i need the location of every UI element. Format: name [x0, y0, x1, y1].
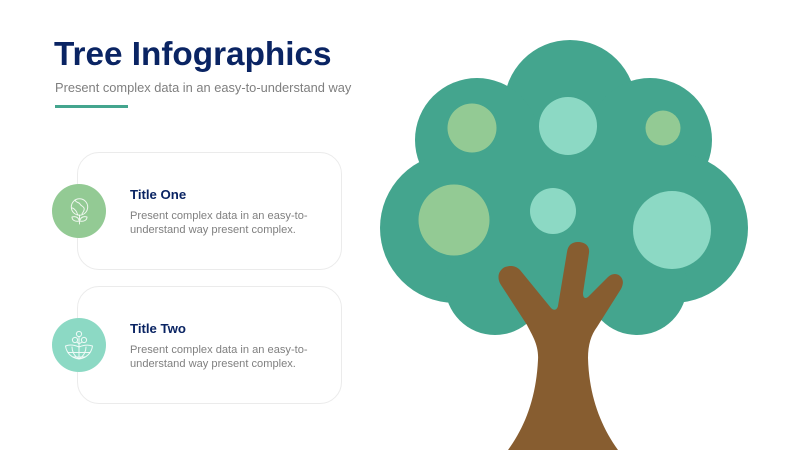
canopy	[380, 40, 748, 335]
card heading: Title Two	[130, 321, 186, 336]
card text: Present complex data in an easy-to-	[130, 210, 308, 222]
panel: title two	[52, 286, 342, 404]
card outline	[77, 152, 342, 270]
icon: bowl plant	[52, 318, 106, 372]
icon: globe plant	[52, 184, 106, 238]
card text: understand way present complex.	[130, 358, 296, 370]
card text: Present complex data in an easy-to-	[130, 344, 308, 356]
card outline	[77, 286, 342, 404]
trunk	[498, 242, 623, 450]
title: Tree Infographics	[54, 36, 332, 73]
card text: understand way present complex.	[130, 224, 296, 236]
subtitle: Present complex data in an easy-to-understand way	[55, 80, 351, 95]
card text	[130, 210, 308, 236]
panel: title one	[52, 152, 342, 270]
canopy fruit circles	[418, 97, 711, 269]
card heading: Title One	[130, 187, 186, 202]
card text	[130, 344, 308, 370]
accent line	[55, 105, 128, 108]
